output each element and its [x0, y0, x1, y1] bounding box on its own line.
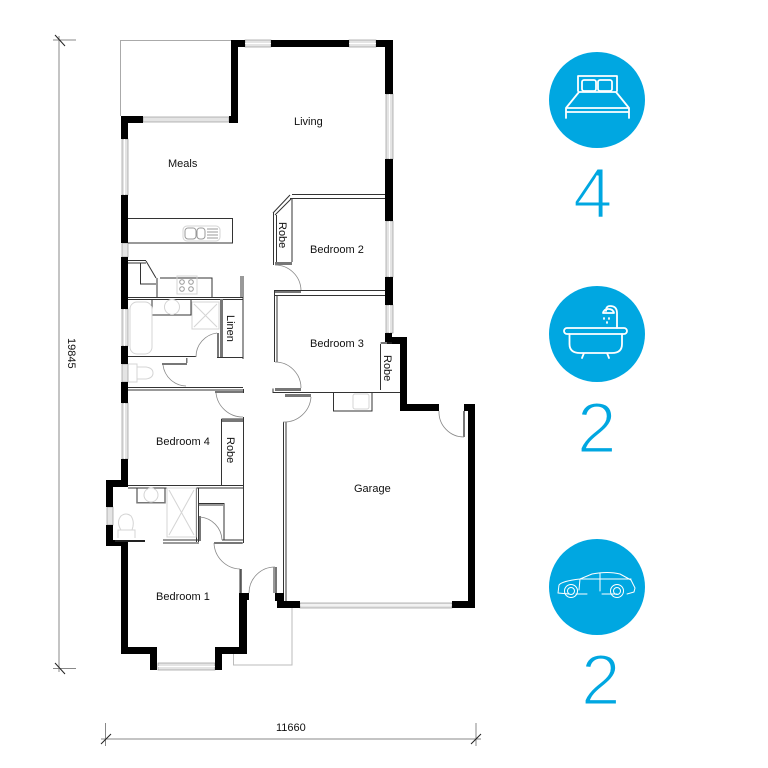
icon: bath — [549, 286, 645, 382]
ensuite shower — [167, 488, 196, 537]
room labels: Linen — [224, 315, 236, 342]
dimension: depth — [53, 35, 77, 674]
dimension: width: 11660 — [276, 722, 306, 734]
basin — [164, 300, 180, 314]
ensuite toilet — [118, 514, 135, 538]
room labels: Bedroom 1 — [156, 591, 210, 603]
floor plan — [106, 40, 475, 670]
icon: bed — [549, 52, 645, 148]
room labels: Living — [294, 116, 323, 128]
bedroom count: 4 — [573, 154, 612, 234]
interior walls — [115, 194, 465, 601]
icon: car — [549, 539, 645, 635]
room labels — [156, 116, 393, 603]
garage count: 2 — [581, 642, 620, 720]
room labels: Robe — [381, 355, 393, 381]
shower — [192, 302, 219, 329]
door swings — [163, 265, 464, 593]
bedrooms stat — [549, 52, 645, 234]
ensuite basin — [144, 488, 158, 502]
kitchen sink — [183, 226, 220, 241]
cooktop — [177, 276, 197, 294]
porch outline — [234, 608, 292, 665]
exterior walls — [106, 40, 475, 670]
room labels: Bedroom 3 — [310, 338, 364, 350]
bath — [130, 302, 152, 354]
laundry sink — [353, 394, 369, 409]
room labels: Bedroom 4 — [156, 436, 210, 448]
room labels: Meals — [168, 158, 198, 170]
room labels: Robe — [224, 437, 236, 463]
bathroom count: 2 — [577, 390, 616, 468]
room labels: Garage — [354, 483, 391, 495]
toilet — [128, 364, 153, 382]
windows — [107, 40, 452, 670]
pergola outline — [120, 40, 231, 116]
room labels: Robe — [276, 222, 288, 248]
fixtures — [118, 226, 369, 538]
bathrooms stat — [549, 286, 645, 468]
room labels: Bedroom 2 — [310, 244, 364, 256]
dimension: width — [101, 722, 481, 746]
dimension: depth: 19845 — [65, 338, 77, 369]
garage stat — [549, 539, 645, 720]
